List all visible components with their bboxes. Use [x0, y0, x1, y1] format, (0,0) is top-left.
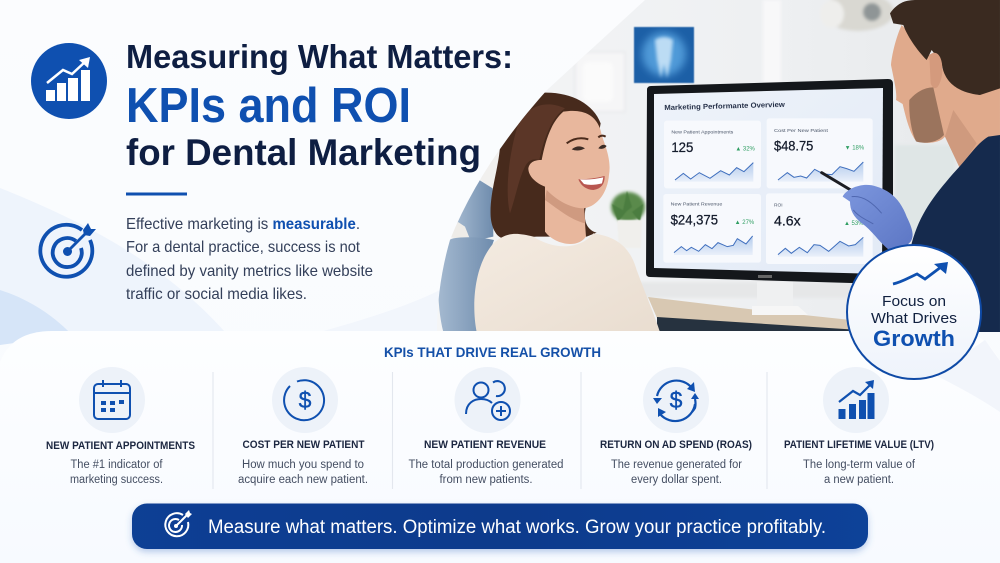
card: cost per new patient: $48.75 — [774, 138, 814, 154]
x-ray picture — [634, 27, 694, 83]
section heading: KPIs THAT DRIVE REAL GROWTH — [384, 344, 601, 360]
KPI: cost per new patient: acquire each new patient. — [238, 474, 368, 486]
pen — [822, 173, 853, 192]
KPI: return on ad spend: every dollar spent. — [631, 474, 722, 486]
card: cost per new patient: ▼ 18% — [845, 145, 865, 151]
eyes — [572, 145, 607, 150]
card: new patient revenue: New Patient Revenue — [671, 202, 723, 208]
KPI: new patient revenue: NEW PATIENT REVENUE — [424, 439, 546, 451]
KPI: cost per new patient: How much you spend to — [242, 459, 364, 471]
dentist: man in navy scrubs — [822, 0, 1000, 358]
monitor — [646, 79, 893, 284]
icon: target with arrow — [40, 223, 96, 277]
icon: rising bars — [838, 380, 874, 419]
hair highlight — [508, 104, 565, 213]
card: ROI: ▲ 53% — [844, 221, 864, 227]
neck shadow — [945, 110, 977, 168]
icon: growth arrow — [893, 262, 948, 284]
clinic background — [440, 0, 959, 330]
KPI: new patient appointments: NEW PATIENT APPOINTMENTS — [46, 440, 195, 452]
skin: face and neck — [891, 25, 1000, 168]
KPI: cost per new patient: COST PER NEW PATIENT — [242, 439, 365, 451]
icon: patients with plus — [466, 381, 510, 420]
ear — [929, 53, 942, 88]
card: ROI: ROI — [774, 202, 783, 208]
face and neck — [528, 111, 610, 244]
dashboard screen content — [663, 100, 873, 264]
hair — [890, 0, 1000, 95]
KPI: new patient appointments — [46, 367, 195, 486]
icon: dollar with cycle arrows: $ — [670, 387, 683, 413]
title: for Dental Marketing — [126, 132, 481, 173]
title: KPIs and ROI — [126, 79, 411, 133]
KPI: return on ad spend: The revenue generated for — [611, 459, 742, 471]
callout: focus on what drives growth: Growth — [873, 326, 955, 351]
card: new patient appointments — [664, 121, 761, 188]
sweater — [474, 233, 660, 332]
intro paragraph: Effective marketing is measurable. — [126, 216, 360, 233]
KPI: new patient appointments: marketing success. — [70, 474, 163, 486]
KPI: patient lifetime value: PATIENT LIFETIME VALUE (LTV) — [784, 439, 934, 451]
KPI: cost per new patient — [238, 367, 368, 486]
neck shadow — [545, 190, 585, 223]
potted plant — [608, 190, 646, 222]
glove — [843, 185, 913, 251]
KPI: new patient appointments: The #1 indicator of — [70, 459, 163, 471]
icon: calendar — [94, 380, 130, 419]
card: cost per new patient — [767, 118, 873, 188]
intro paragraph: defined by vanity metrics like website — [126, 263, 373, 280]
KPI: return on ad spend: RETURN ON AD SPEND (ROAS) — [600, 439, 752, 451]
KPI: return on ad spend — [600, 367, 752, 486]
title underline — [126, 192, 187, 196]
beard — [909, 87, 944, 143]
scrubs — [912, 135, 1000, 332]
KPI: patient lifetime value — [784, 367, 934, 486]
card: new patient revenue: $24,375 — [671, 211, 718, 227]
icon: dollar circle: $ — [299, 387, 312, 413]
KPI: new patient revenue: The total production generated — [408, 459, 564, 471]
column dividers — [213, 372, 767, 489]
KPI: patient lifetime value: a new patient. — [824, 474, 894, 486]
callout: focus on what drives growth: Focus on — [882, 293, 946, 310]
monitor stand — [752, 282, 808, 315]
photo: dentist showing dashboard to patient — [430, 0, 1000, 358]
patient in dental chair — [438, 93, 660, 332]
dental chair — [438, 180, 494, 331]
desk — [642, 283, 849, 331]
icon: growth chart badge — [31, 43, 107, 119]
card: ROI: 4.6x — [774, 212, 801, 228]
icon: dollar with cycle arrows — [653, 381, 699, 421]
title: Measuring What Matters: — [126, 38, 513, 75]
intro paragraph: For a dental practice, success is not — [126, 239, 361, 256]
title — [126, 38, 513, 173]
card: new patient appointments: New Patient Appointments — [671, 129, 734, 135]
card: cost per new patient: Cost Per New Patient — [774, 128, 829, 134]
card: new patient revenue: ▲ 27% — [735, 220, 755, 226]
banner — [132, 504, 868, 549]
card: new patient appointments: 125 — [671, 139, 694, 155]
KPI: patient lifetime value: The long-term value of — [803, 459, 916, 471]
callout: focus on what drives growth — [847, 245, 981, 379]
card: ROI — [766, 193, 873, 264]
back hair — [491, 93, 601, 238]
KPI: new patient revenue: from new patients. — [440, 474, 532, 486]
card: new patient revenue — [663, 194, 761, 263]
dental lamp — [832, 0, 894, 32]
smile — [578, 176, 605, 190]
intro paragraph: traffic or social media likes. — [126, 286, 307, 303]
intro paragraph — [126, 216, 373, 303]
panel: KPI section — [0, 331, 1000, 563]
callout: focus on what drives growth: What Drives — [871, 310, 957, 327]
icon: white target — [165, 510, 192, 536]
KPI: new patient revenue — [408, 367, 564, 486]
banner: Measure what matters. Optimize what works. Grow your practice profitably. — [208, 517, 826, 538]
dashboard title: Marketing Performante Overview — [664, 100, 785, 112]
card: new patient appointments: ▲ 32% — [735, 147, 756, 153]
